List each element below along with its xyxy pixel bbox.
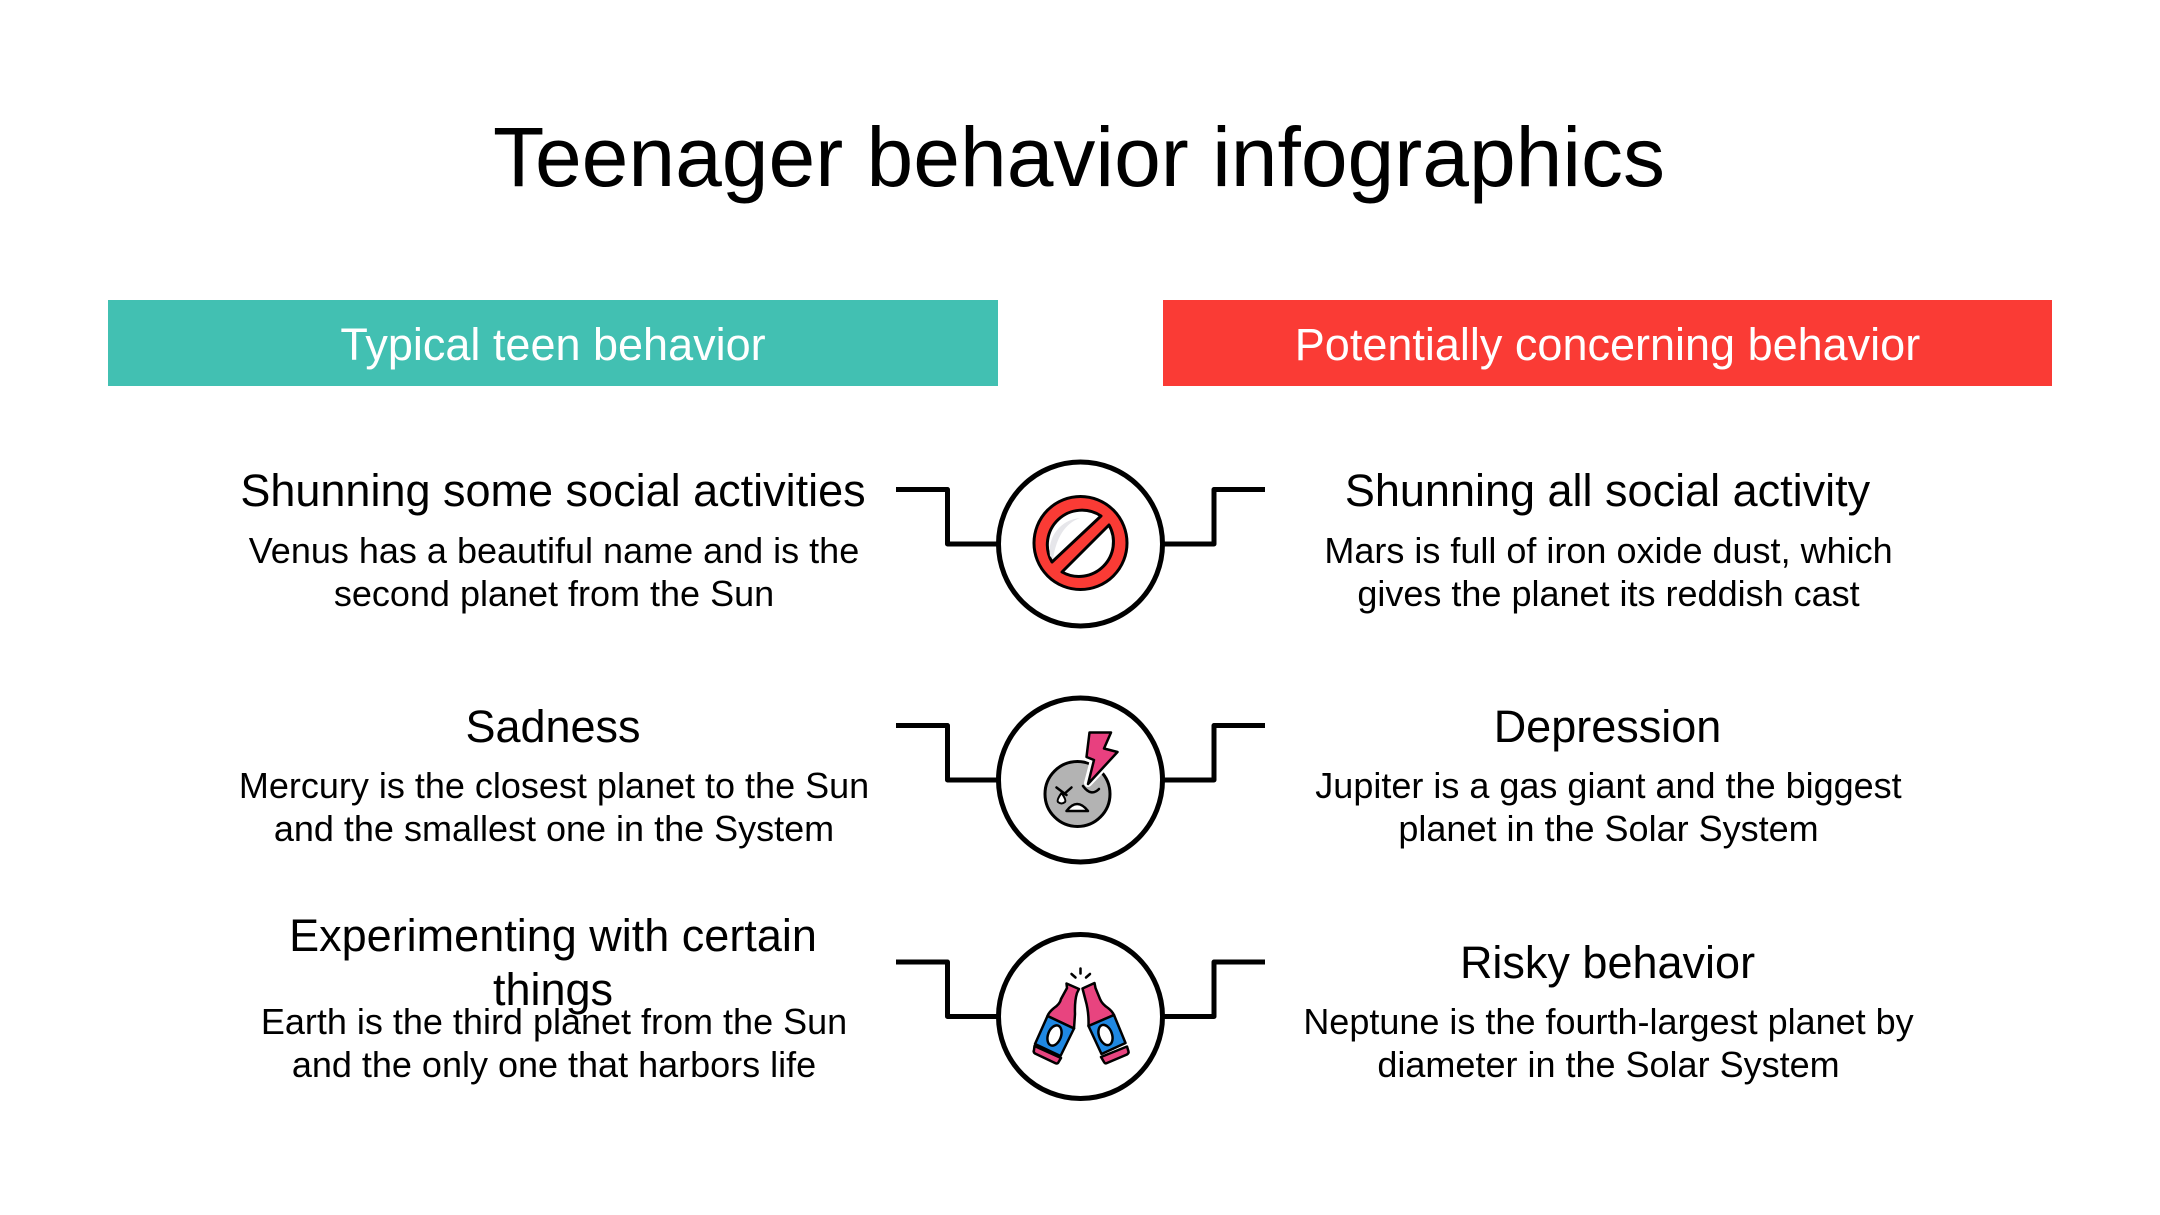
banner: potentially concerning behavior [1163,300,2052,386]
circle row 1 [998,462,1162,626]
text: neptune: diameter in the Solar System [1377,1044,1840,1085]
title: Teenager behavior infographics [493,110,1665,204]
left bottle [1034,984,1079,1064]
heading: experimenting with certain things [289,910,817,1015]
heading: experimenting with certain things: things [493,964,613,1015]
text: mars [1324,530,1893,614]
text: jupiter: Jupiter is a gas giant and the biggest [1315,765,1902,806]
text: jupiter: planet in the Solar System [1398,808,1819,849]
text: mars: gives the planet its reddish cast [1357,572,1860,614]
banner: potentially concerning behavior: Potentially concerning behavior [1295,319,1920,370]
banner: typical teen behavior [108,300,998,386]
text: mercury [239,765,869,849]
heading: risky behavior: Risky behavior [1460,937,1755,988]
icon: prohibited sign [1034,496,1127,590]
text: neptune [1303,1001,1914,1085]
text: neptune: Neptune is the fourth-largest planet by [1303,1001,1914,1042]
heading: sadness: Sadness [465,701,641,752]
text: mercury: and the smallest one in the System [274,808,834,849]
circle row 3 [998,934,1162,1098]
heading: shunning some social activities: Shunning some social activities [240,465,866,516]
text: venus: Venus has a beautiful name and is the [249,530,859,570]
sparks [1072,968,1090,978]
banner: typical teen behavior: Typical teen behavior [340,319,766,370]
icon: sad face with lightning bolt [1045,732,1118,826]
connector row 3 [896,962,1265,1016]
text: earth [261,1001,847,1085]
heading: experimenting with certain things: Experimenting with certain [289,910,817,961]
text: mars: Mars is full of iron oxide dust, which [1324,530,1893,570]
text: earth: Earth is the third planet from the Sun [261,1001,847,1042]
text: mercury: Mercury is the closest planet to the Sun [239,765,869,806]
connector row 2 [896,726,1265,780]
text: earth: and the only one that harbors life [292,1044,816,1085]
heading: shunning all social activity: Shunning all social activity [1345,465,1870,516]
connector row 1 [896,490,1265,544]
text: jupiter [1315,765,1902,849]
right bottle [1082,983,1129,1063]
icon: clinking bottles [1034,968,1129,1064]
text: venus [248,530,859,614]
heading: depression: Depression [1494,701,1721,752]
circle row 2 [998,698,1162,862]
text: venus: second planet from the Sun [334,572,774,614]
